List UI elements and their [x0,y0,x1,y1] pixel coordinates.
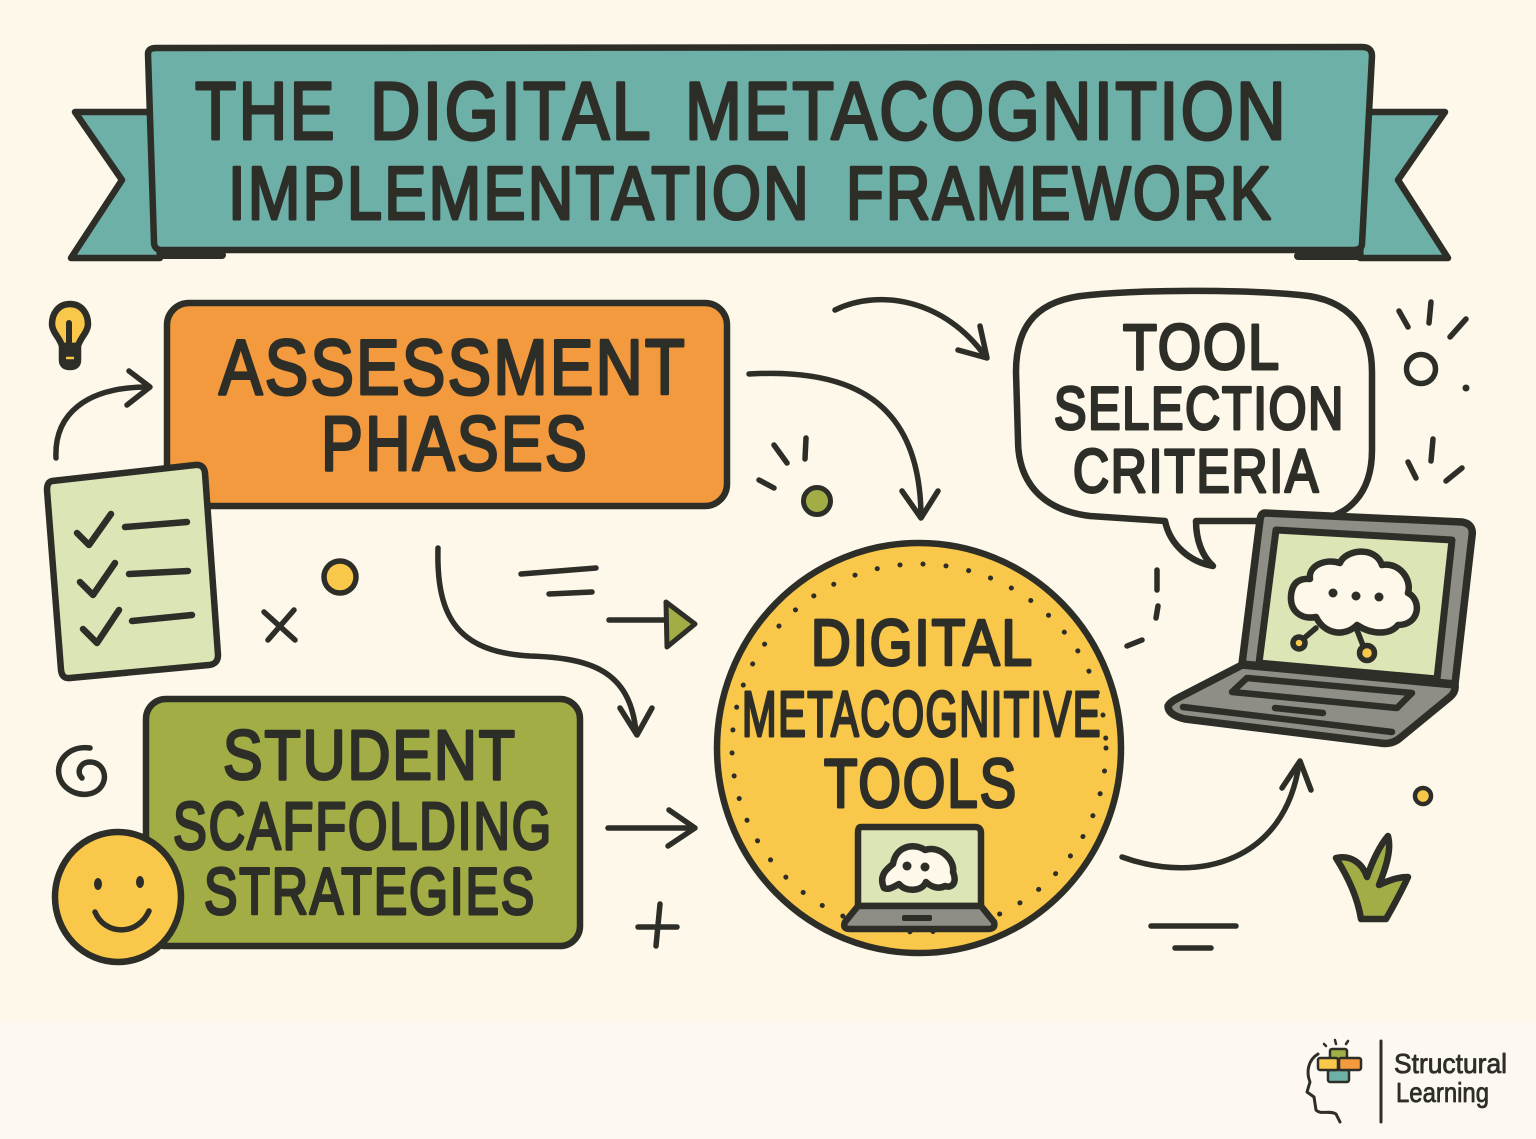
icon: plant sprout [1336,836,1408,919]
icon: laptop with cloud [1168,513,1472,743]
laptop lid [1242,513,1472,684]
panel: assessment phases: ASSESSMENT [219,323,687,411]
title text: DIGITAL [370,66,653,157]
panel: tool selection criteria speech bubble: SELECTION [1054,375,1345,442]
logo blocks [1318,1049,1361,1082]
arrow: triangle pointer [609,602,695,647]
decoration: dashed trail [1127,570,1158,646]
title text: IMPLEMENTATION [228,151,811,235]
panel: student scaffolding strategies: STUDENT [223,716,517,794]
banner right tail [1360,112,1448,258]
logo wordmark: Learning [1396,1077,1489,1108]
logo wordmark [1394,1048,1507,1108]
panel: digital metacognitive tools: DIGITAL [811,606,1034,679]
panel: digital metacognitive tools: TOOLS [824,745,1018,822]
logo sparks [1324,1040,1348,1046]
icon: small laptop with cloud [844,827,994,929]
icon: checklist [47,465,218,678]
panel: tool selection criteria speech bubble: CRITERIA [1073,437,1320,505]
logo head outline [1307,1054,1340,1122]
arrow: assessment to digital tools [749,373,938,518]
laptop screen [1259,530,1452,679]
arrow: scaffolding to digital tools [608,810,695,846]
logo: Structural Learning [1307,1040,1507,1122]
banner main ribbon [148,47,1372,250]
laptop cloud [1291,552,1417,660]
icon: spiral [59,748,104,794]
title text: THE [195,66,337,157]
arrow: checklist to assessment [56,371,150,458]
arrow: assessment to scaffolding [438,548,652,735]
panel: student scaffolding strategies: STRATEGIES [204,854,536,928]
logo divider [1380,1041,1382,1122]
arrow: assessment to tool selection [835,300,987,358]
title banner [71,47,1448,258]
panel: tool selection criteria speech bubble [1016,291,1372,566]
arrow: digital tools to laptop [1122,761,1311,868]
decoration: cross x [264,610,295,640]
logo wordmark: Structural [1394,1048,1507,1079]
decoration: motion lines [521,568,596,594]
title text [195,66,1288,235]
panel: student scaffolding strategies [146,699,580,946]
panel: tool selection criteria speech bubble: TOOL [1123,311,1281,383]
decoration: ring [1406,354,1436,384]
panel: assessment phases [167,303,727,506]
decoration: sun sparks top right [1399,302,1466,481]
decoration: dot [1462,384,1470,392]
decoration: yellow ring [324,561,356,593]
decoration: plus [638,904,677,946]
decorations: sparks and marks [264,302,1470,948]
banner left tail [71,112,160,258]
decoration: small yellow ring [1415,788,1431,804]
title text: FRAMEWORK [846,151,1273,235]
decoration: double dash [1151,926,1236,948]
panel: digital metacognitive tools [717,543,1121,953]
panel: assessment phases: PHASES [321,401,589,487]
icon: light bulb [52,304,88,367]
title text: METACOGNITION [685,66,1288,157]
panel: student scaffolding strategies: SCAFFOLDING [173,789,553,864]
panel: digital metacognitive tools: METACOGNITIVE [742,678,1102,750]
decoration: green dot with sparks [759,438,830,514]
icon: smiley face [55,832,181,962]
laptop base [1168,665,1455,743]
